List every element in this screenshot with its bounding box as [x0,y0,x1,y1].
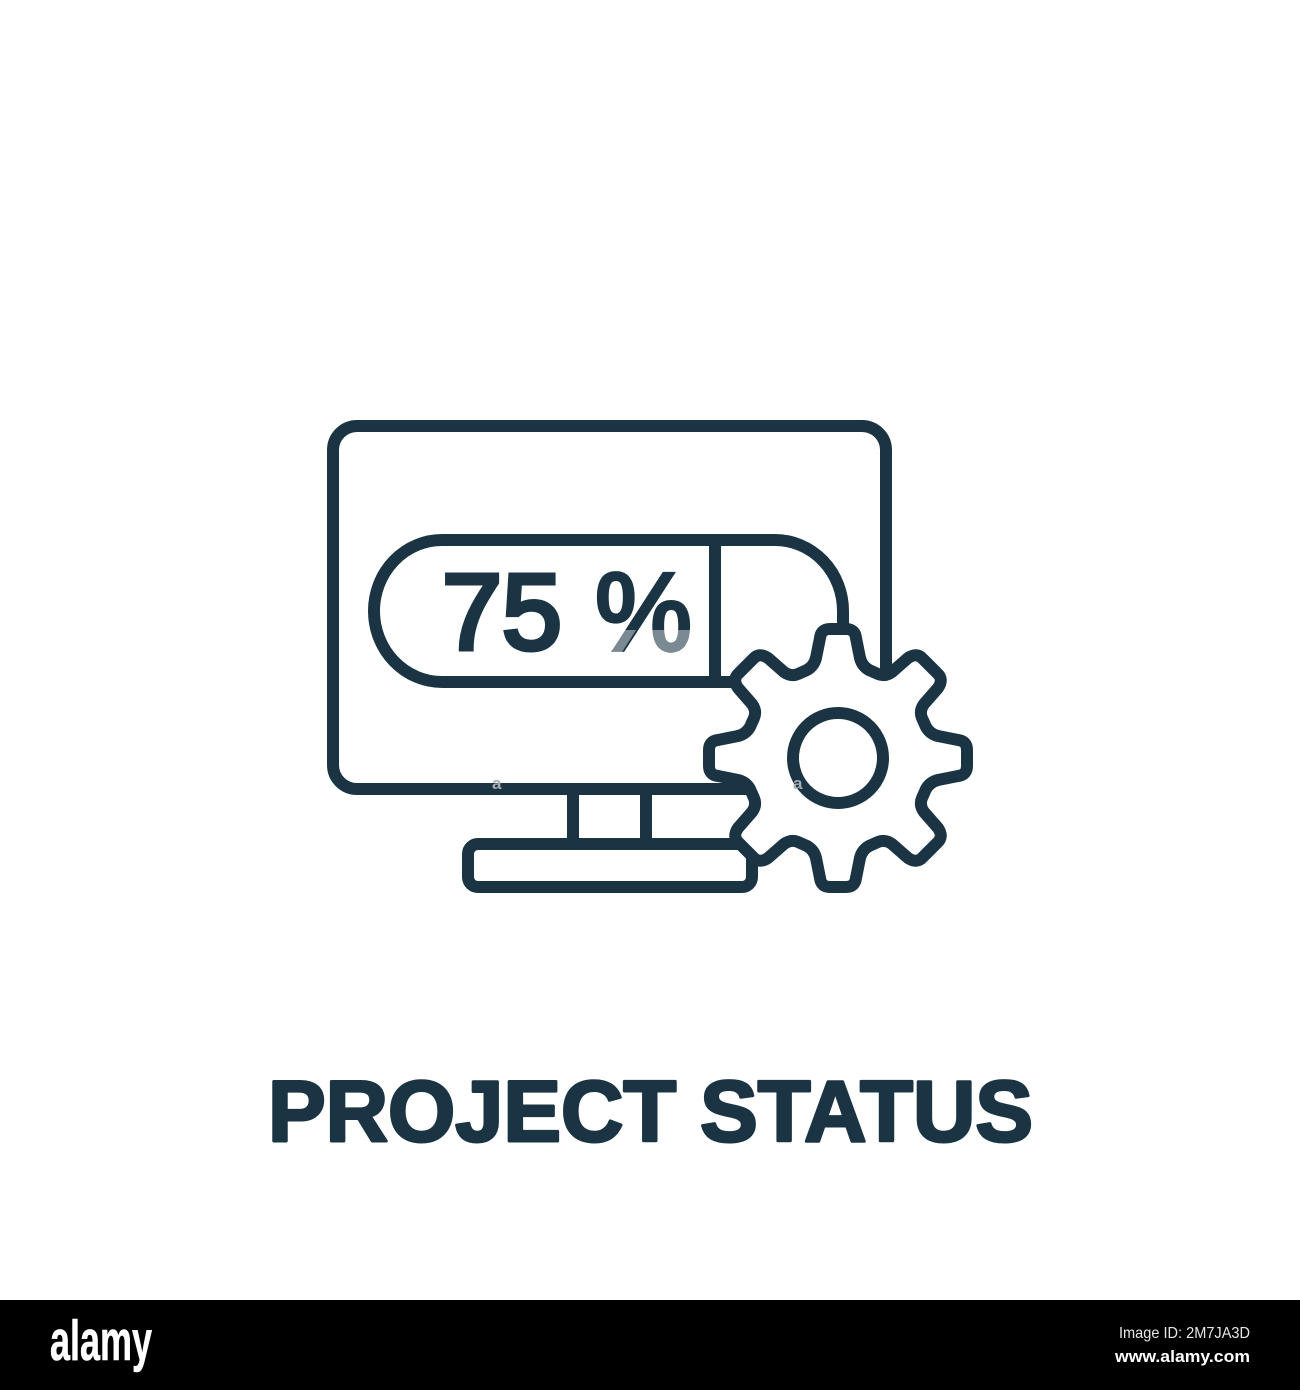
image id: Image ID: 2M7JA3D [1119,1325,1250,1342]
progress bar divider [709,540,721,682]
icon: monitor screen [333,426,886,789]
footer bar [0,1300,1300,1390]
icon: monitor base [468,844,752,887]
progress value [442,551,692,674]
progress number 75: 75 [442,551,562,672]
icon: monitor with progress bar and gear [333,426,967,887]
icon: monitor stand [573,795,646,838]
footer logo: alamy [50,1309,152,1373]
watermark fragment on monitor edge: a [492,774,502,793]
icon: gear [709,629,967,887]
gear centre hole [793,713,883,803]
watermark fade over percent sign [612,630,692,652]
title: PROJECT STATUS [268,1064,1033,1160]
website: www.alamy.com [1114,1347,1250,1366]
progress percent sign: % [595,551,692,674]
watermark fragment on gear hole: a [793,774,803,793]
progress bar outline [374,540,843,682]
gear outline [709,629,967,887]
